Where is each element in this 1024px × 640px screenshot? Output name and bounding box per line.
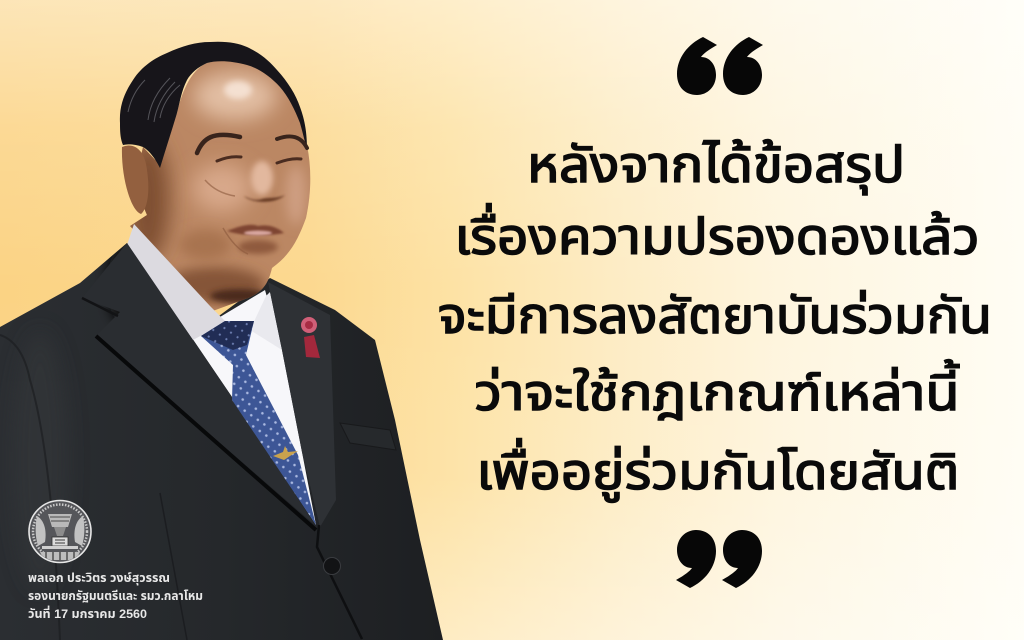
bowl xyxy=(48,514,72,527)
left lapel xyxy=(82,243,315,525)
right lapel xyxy=(268,282,336,527)
ear xyxy=(122,146,148,214)
face shading xyxy=(126,72,306,303)
shirt collar xyxy=(127,224,226,340)
quote text xyxy=(438,137,992,502)
wrinkles xyxy=(205,180,248,254)
base band xyxy=(40,552,80,560)
tie clip xyxy=(273,446,298,460)
caption: name, title, date xyxy=(28,571,203,621)
jacket button xyxy=(324,558,340,574)
mouth xyxy=(227,225,284,254)
hair xyxy=(120,42,307,168)
portrait: man in dark suit xyxy=(0,42,443,640)
suit jacket xyxy=(0,243,443,640)
caption: name, title, date: พลเอก ประวิตร วงษ์สุวรรณ xyxy=(28,571,170,585)
lapel shadow line xyxy=(96,336,316,530)
guardian lions xyxy=(36,516,46,546)
jacket dart xyxy=(160,493,187,640)
closing quotation mark xyxy=(676,530,762,588)
quote text: เพื่ออยู่ร่วมกันโดยสันติ xyxy=(476,438,960,502)
quote text: หลังจากได้ข้อสรุป xyxy=(527,137,905,195)
plaque xyxy=(52,537,68,546)
breast pocket xyxy=(340,423,396,450)
quote text: เรื่องความปรองดองแล้ว xyxy=(454,203,980,265)
opening quotation mark xyxy=(677,37,763,95)
hair sheen xyxy=(128,78,180,122)
caption: name, title, date: วันที่ 17 มกราคม 2560 xyxy=(28,605,147,621)
jacket shading xyxy=(102,243,128,320)
government seal xyxy=(29,500,91,562)
jacket front edge xyxy=(317,525,362,639)
nose shadow xyxy=(244,195,285,202)
tie xyxy=(201,321,316,525)
white shirt front xyxy=(190,290,316,525)
lapel pins xyxy=(301,317,320,358)
caption: name, title, date: รองนายกรัฐมนตรีและ รมว.กลาโหม xyxy=(28,589,203,603)
eyebrows xyxy=(197,135,307,153)
lapel notch line xyxy=(82,298,118,316)
quote text: ว่าจะใช้กฎเกณฑ์เหล่านี้ xyxy=(474,359,960,421)
face and neck xyxy=(130,60,310,312)
quote text: จะมีการลงสัตยาบันร่วมกัน xyxy=(438,288,992,344)
eyes xyxy=(217,157,301,163)
sleeve seam xyxy=(0,335,60,640)
